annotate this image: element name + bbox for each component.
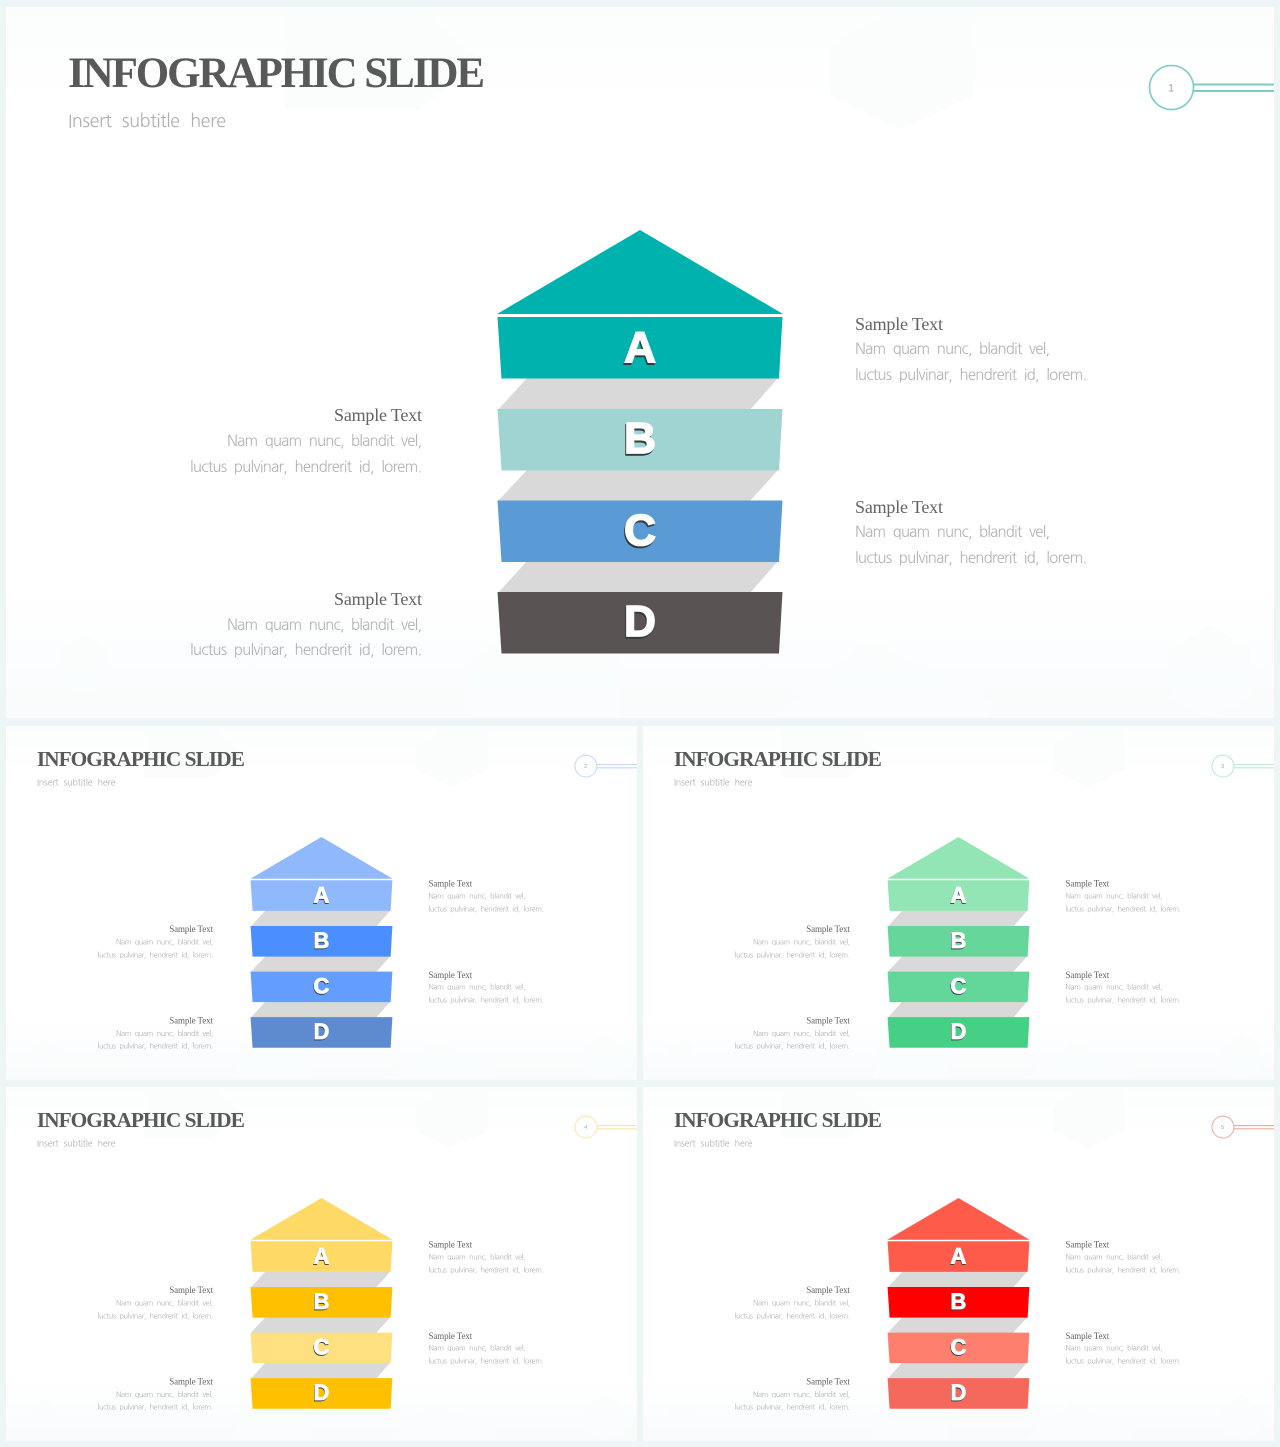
- page number badge: [1150, 66, 1274, 110]
- text block: bottom left: [190, 589, 422, 658]
- arrow roof: [250, 837, 393, 879]
- text block: top right: Nam quam nunc, blandit vel,: [428, 893, 525, 901]
- text block: upper left: [735, 924, 851, 959]
- text block: top right: [1065, 879, 1181, 914]
- page number badge: [575, 1116, 637, 1138]
- text block: lower right: [1065, 1331, 1181, 1366]
- text block: lower right: Nam quam nunc, blandit vel,: [1065, 984, 1162, 992]
- text block: lower right: Nam quam nunc, blandit vel,: [855, 525, 1050, 540]
- text block: upper left: Sample Text: [806, 1285, 851, 1295]
- band D: [888, 1017, 1029, 1048]
- text block: upper left: luctus pulvinar, hendrerit id, lorem.: [98, 951, 213, 959]
- text block: upper left: Sample Text: [806, 924, 851, 934]
- band D: D: [624, 597, 656, 646]
- text block: lower right: luctus pulvinar, hendrerit id, lorem.: [855, 551, 1087, 566]
- text block: bottom left: [98, 1377, 214, 1411]
- text block: top right: Sample Text: [1065, 1240, 1110, 1250]
- text block: top right: Sample Text: [428, 1240, 473, 1250]
- text block: upper left: Sample Text: [169, 924, 214, 934]
- band D: D: [314, 1380, 329, 1405]
- panel: slide 3 green: [643, 726, 1274, 1080]
- subtitle: Insert subtitle here: [674, 1140, 753, 1149]
- text block: bottom left: luctus pulvinar, hendrerit id, lorem.: [735, 1042, 850, 1050]
- band C: C: [951, 1335, 967, 1360]
- band A: A: [314, 1244, 330, 1269]
- band B: B: [624, 414, 656, 463]
- text block: upper left: [98, 1285, 214, 1320]
- layered arrow diagram: [887, 1198, 1030, 1409]
- band B: B: [951, 1289, 966, 1314]
- text block: bottom left: Nam quam nunc, blandit vel,: [227, 618, 422, 633]
- band C: [888, 972, 1029, 1002]
- subtitle: Insert subtitle here: [674, 779, 753, 788]
- band C: C: [314, 974, 330, 999]
- text block: bottom left: Nam quam nunc, blandit vel,: [753, 1391, 850, 1399]
- text block: top right: Nam quam nunc, blandit vel,: [1065, 893, 1162, 901]
- text block: upper left: Nam quam nunc, blandit vel,: [116, 938, 213, 946]
- page number badge: 1: [1168, 82, 1174, 94]
- band B: [888, 926, 1029, 957]
- text block: bottom left: [735, 1016, 851, 1050]
- panel: slide 1 teal: [6, 7, 1274, 718]
- title: INFOGRAPHIC SLIDE: [674, 1108, 882, 1132]
- band C: [251, 1333, 392, 1363]
- text block: upper left: Nam quam nunc, blandit vel,: [753, 938, 850, 946]
- title: INFOGRAPHIC SLIDE: [37, 1108, 245, 1132]
- band D: D: [951, 1380, 966, 1405]
- text block: bottom left: Sample Text: [334, 589, 422, 609]
- subtitle: Insert subtitle here: [37, 779, 116, 788]
- text block: top right: luctus pulvinar, hendrerit id, lorem.: [428, 906, 544, 914]
- text block: bottom left: luctus pulvinar, hendrerit id, lorem.: [190, 643, 422, 658]
- band D: [888, 1378, 1029, 1409]
- text block: top right: luctus pulvinar, hendrerit id, lorem.: [428, 1267, 544, 1275]
- text block: top right: Sample Text: [1065, 879, 1110, 889]
- text block: top right: luctus pulvinar, hendrerit id, lorem.: [1065, 906, 1181, 914]
- band B: [498, 409, 782, 470]
- title: INFOGRAPHIC SLIDE: [37, 747, 245, 771]
- text block: upper left: luctus pulvinar, hendrerit id, lorem.: [190, 460, 422, 475]
- text block: upper left: Sample Text: [334, 405, 422, 425]
- text block: lower right: luctus pulvinar, hendrerit id, lorem.: [428, 997, 544, 1005]
- panel: slide 4 yellow: [6, 1087, 637, 1441]
- text block: lower right: Sample Text: [428, 970, 473, 980]
- text block: upper left: Sample Text: [169, 1285, 214, 1295]
- text block: lower right: [428, 1331, 544, 1366]
- text block: lower right: luctus pulvinar, hendrerit id, lorem.: [428, 1358, 544, 1366]
- band A: [251, 880, 392, 911]
- text block: lower right: Sample Text: [855, 497, 943, 517]
- band B: B: [314, 928, 329, 953]
- band B: [251, 1287, 392, 1318]
- arrow roof: [497, 230, 783, 314]
- text block: bottom left: luctus pulvinar, hendrerit id, lorem.: [735, 1403, 850, 1411]
- text block: bottom left: [98, 1016, 214, 1050]
- text block: lower right: Sample Text: [428, 1331, 473, 1341]
- text block: lower right: luctus pulvinar, hendrerit id, lorem.: [1065, 997, 1181, 1005]
- text block: upper left: Nam quam nunc, blandit vel,: [753, 1299, 850, 1307]
- text block: upper left: luctus pulvinar, hendrerit id, lorem.: [98, 1312, 213, 1320]
- text block: lower right: Nam quam nunc, blandit vel,: [1065, 1345, 1162, 1353]
- text block: upper left: Nam quam nunc, blandit vel,: [116, 1299, 213, 1307]
- text block: upper left: luctus pulvinar, hendrerit id, lorem.: [735, 1312, 850, 1320]
- text block: lower right: Sample Text: [1065, 970, 1110, 980]
- band A: A: [624, 323, 656, 372]
- text block: lower right: Nam quam nunc, blandit vel,: [428, 984, 525, 992]
- band B: [888, 1287, 1029, 1318]
- band D: [251, 1378, 392, 1409]
- layered arrow diagram: [887, 837, 1030, 1048]
- band A: [251, 1241, 392, 1272]
- page number badge: [1212, 1116, 1274, 1138]
- page number badge: 2: [584, 764, 587, 770]
- text block: bottom left: Nam quam nunc, blandit vel,: [116, 1030, 213, 1038]
- band C: [888, 1333, 1029, 1363]
- text block: lower right: [855, 497, 1087, 566]
- page number badge: 5: [1221, 1125, 1224, 1131]
- text block: bottom left: Sample Text: [806, 1016, 851, 1026]
- text block: bottom left: Sample Text: [806, 1377, 851, 1387]
- text block: bottom left: Nam quam nunc, blandit vel,: [116, 1391, 213, 1399]
- band D: D: [314, 1019, 329, 1044]
- band C: C: [624, 506, 656, 555]
- text block: bottom left: Sample Text: [169, 1377, 214, 1387]
- band A: [888, 880, 1029, 911]
- band A: A: [951, 883, 967, 908]
- arrow roof: [250, 1198, 393, 1240]
- text block: lower right: luctus pulvinar, hendrerit id, lorem.: [1065, 1358, 1181, 1366]
- title: INFOGRAPHIC SLIDE: [68, 50, 485, 97]
- arrow roof: [887, 1198, 1030, 1240]
- text block: bottom left: Sample Text: [169, 1016, 214, 1026]
- text block: bottom left: [735, 1377, 851, 1411]
- text block: bottom left: Nam quam nunc, blandit vel,: [753, 1030, 850, 1038]
- subtitle: Insert subtitle here: [37, 1140, 116, 1149]
- band C: C: [951, 974, 967, 999]
- text block: top right: Sample Text: [428, 879, 473, 889]
- text block: upper left: [98, 924, 214, 959]
- band B: [251, 926, 392, 957]
- text block: top right: Nam quam nunc, blandit vel,: [1065, 1254, 1162, 1262]
- text block: top right: luctus pulvinar, hendrerit id, lorem.: [1065, 1267, 1181, 1275]
- panel: slide 5 red: [643, 1087, 1274, 1441]
- text block: top right: [1065, 1240, 1181, 1275]
- page number badge: 4: [584, 1125, 587, 1131]
- band C: [498, 500, 782, 562]
- title: INFOGRAPHIC SLIDE: [674, 747, 882, 771]
- band A: [498, 317, 782, 378]
- layered arrow diagram: [250, 1198, 393, 1409]
- text block: lower right: Nam quam nunc, blandit vel,: [428, 1345, 525, 1353]
- panel: slide 2 blue: [6, 726, 637, 1080]
- band B: B: [951, 928, 966, 953]
- text block: top right: [428, 879, 544, 914]
- text block: top right: [855, 314, 1087, 383]
- text block: bottom left: luctus pulvinar, hendrerit id, lorem.: [98, 1042, 213, 1050]
- text block: top right: [428, 1240, 544, 1275]
- layered arrow diagram: [250, 837, 393, 1048]
- band D: [498, 592, 782, 654]
- text block: upper left: Nam quam nunc, blandit vel,: [227, 434, 422, 449]
- text block: lower right: [1065, 970, 1181, 1005]
- text block: lower right: [428, 970, 544, 1005]
- text block: upper left: luctus pulvinar, hendrerit id, lorem.: [735, 951, 850, 959]
- arrow roof: [887, 837, 1030, 879]
- layered arrow diagram: [497, 230, 783, 654]
- text block: top right: Nam quam nunc, blandit vel,: [428, 1254, 525, 1262]
- page number badge: [1212, 755, 1274, 777]
- band A: [888, 1241, 1029, 1272]
- band B: B: [314, 1289, 329, 1314]
- band A: A: [314, 883, 330, 908]
- text block: top right: Sample Text: [855, 314, 943, 334]
- text block: bottom left: luctus pulvinar, hendrerit id, lorem.: [98, 1403, 213, 1411]
- band D: D: [951, 1019, 966, 1044]
- page number badge: 3: [1221, 764, 1224, 770]
- band C: [251, 972, 392, 1002]
- text block: top right: luctus pulvinar, hendrerit id, lorem.: [855, 368, 1087, 383]
- text block: lower right: Sample Text: [1065, 1331, 1110, 1341]
- band D: [251, 1017, 392, 1048]
- band C: C: [314, 1335, 330, 1360]
- page number badge: [575, 755, 637, 777]
- subtitle: Insert subtitle here: [68, 112, 226, 130]
- text block: top right: Nam quam nunc, blandit vel,: [855, 342, 1050, 357]
- text block: upper left: [735, 1285, 851, 1320]
- text block: upper left: [190, 405, 422, 475]
- band A: A: [951, 1244, 967, 1269]
